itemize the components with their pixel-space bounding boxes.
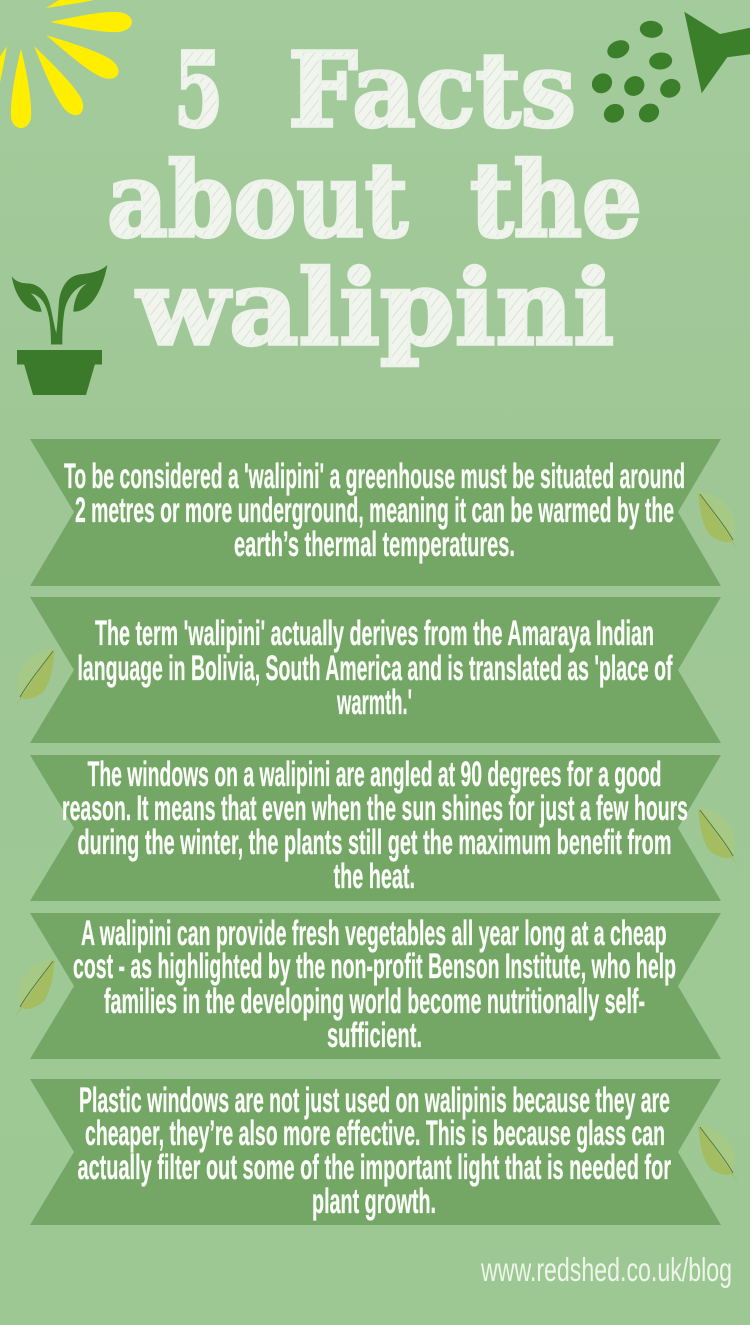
icon: leaf 1 [698, 492, 739, 551]
icon: leaf 3 [698, 808, 739, 867]
fact 3 text: the heat. [334, 857, 415, 896]
fact 4 text [73, 914, 676, 1055]
title: the [470, 140, 642, 261]
icon: water drops [588, 20, 684, 126]
title [107, 30, 642, 369]
icon: leaf 2 [14, 649, 55, 708]
fact 4 text: sufficient. [327, 1016, 422, 1055]
fact 2 text: warmth.' [336, 683, 412, 722]
title: walipini [136, 248, 614, 369]
icon: sun rays [0, 0, 132, 128]
icon: watering can spout [684, 12, 750, 93]
panel: fact 4 [30, 913, 721, 1059]
fact 3 text [62, 755, 688, 896]
icon: leaf 5 [698, 1125, 739, 1184]
panel: fact 5 [30, 1079, 721, 1225]
panel: fact 3 [30, 755, 721, 901]
fact 5 text [78, 1081, 671, 1221]
panel: fact 1 [30, 439, 721, 586]
fact 5 text: plant growth. [312, 1182, 436, 1221]
fact 1 text [64, 457, 685, 564]
fact 2 text [78, 614, 673, 722]
icon: leaf 4 [14, 959, 55, 1018]
title: about [107, 140, 408, 261]
panel: fact 2 [30, 597, 721, 743]
title: 5 [174, 30, 223, 151]
fact 1 text: earth’s thermal temperatures. [234, 525, 515, 564]
icon: potted plant [12, 265, 107, 395]
title: Facts [288, 30, 576, 151]
